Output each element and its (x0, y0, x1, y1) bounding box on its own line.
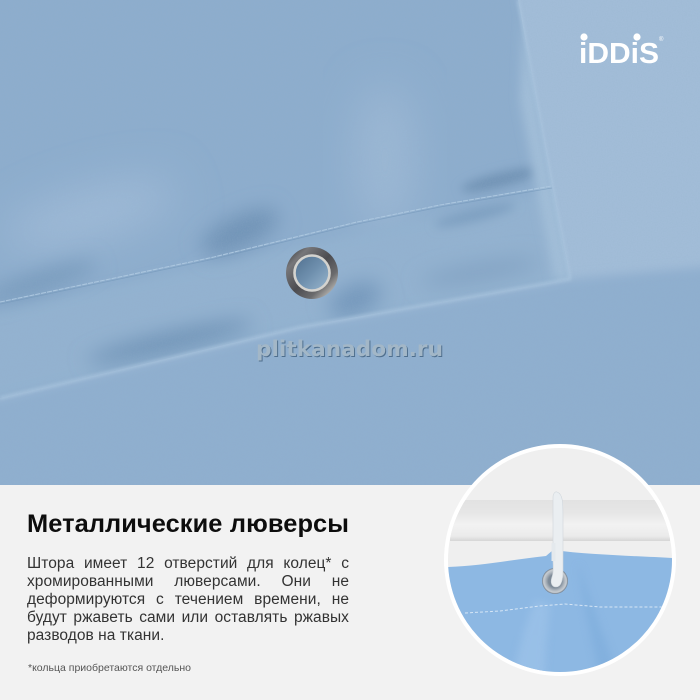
logo: iDDiS: ® (659, 36, 664, 43)
text block: description: деформируются с течением времени, не (27, 591, 349, 608)
logo: iDDiS: iDDiS (579, 38, 659, 70)
icon: metal grommet (286, 247, 338, 299)
white circle frame (444, 444, 676, 676)
inset photo: ring on curtain rod (444, 444, 676, 676)
text block: description: хромированными люверсами. Они не (27, 573, 349, 590)
curtain grommet (542, 568, 568, 594)
stitched seam (0, 186, 552, 302)
text block: description: разводов на ткани. (27, 627, 164, 644)
fabric grain (0, 0, 700, 485)
watermark: plitkanadom.ru: plitkanadom.ru (256, 337, 443, 361)
white ring (551, 492, 563, 587)
flap edge highlight (0, 0, 570, 398)
panel: text background (0, 485, 700, 700)
watermark: plitkanadom.ru: plitkanadom.ru (257, 338, 444, 362)
folded fabric flap (0, 0, 553, 396)
photo: blue curtain fabric with fold, seam and grommet (0, 0, 700, 485)
text block: description: Штора имеет 12 отверстий для колец* с (27, 555, 349, 572)
blue curtain (448, 550, 672, 680)
footnote: *кольца приобретаются отдельно (28, 662, 191, 674)
stitching (465, 604, 665, 613)
heading: Металлические люверсы (27, 510, 349, 538)
text block: description: будут ржаветь сами или оставлять ржавых (27, 609, 349, 626)
curtain rod (450, 500, 670, 541)
text block: description (27, 555, 349, 644)
background fabric (0, 0, 700, 485)
